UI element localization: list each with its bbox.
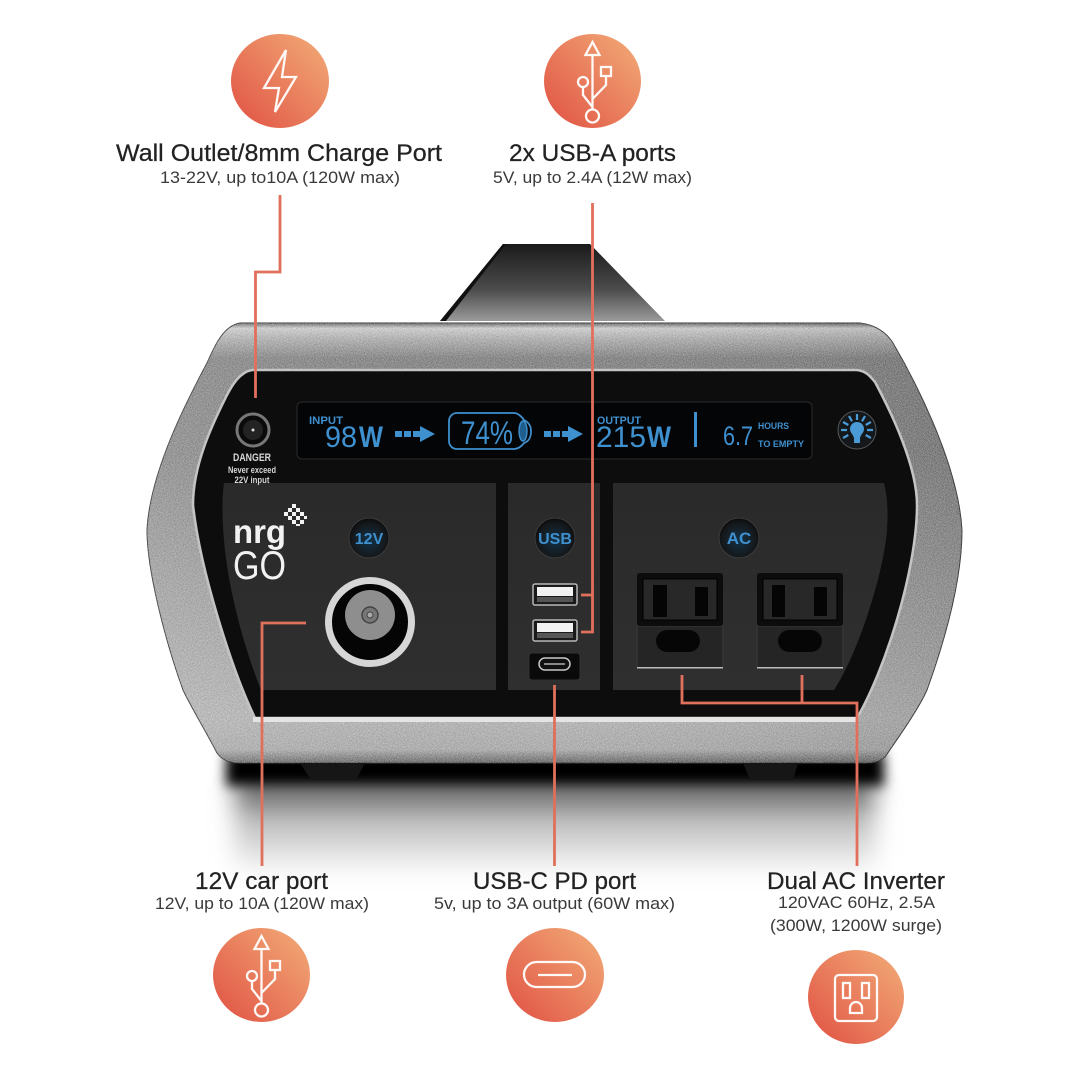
label: dual AC inverter: (300W, 1200W surge) (770, 916, 942, 935)
USB badge: USB (538, 531, 572, 548)
output reading: W (647, 421, 672, 454)
12V badge (349, 518, 389, 558)
icon: AC outlet (808, 950, 904, 1044)
label: dual AC inverter (767, 868, 945, 935)
icon: USB bottom (213, 928, 310, 1022)
label: dual AC inverter: 120VAC 60Hz, 2.5A (778, 893, 936, 912)
LCD display (297, 402, 812, 459)
arrow (544, 426, 583, 442)
icon: light button (838, 411, 876, 449)
icon: USB-C (506, 928, 604, 1022)
label: wall outlet charge port: Wall Outlet/8mm Charge Port (116, 140, 442, 167)
12V car socket (328, 580, 412, 664)
handle (440, 244, 665, 321)
lower highlight (253, 717, 858, 722)
label: 12V car port (155, 868, 369, 913)
input reading: W (359, 421, 384, 454)
label: USB-C PD port: USB-C PD port (473, 868, 636, 895)
label: 12V car port: 12V car port (195, 868, 328, 895)
time remaining: TO EMPTY (758, 439, 805, 450)
black front panel (193, 370, 917, 718)
label: USB-C PD port: 5v, up to 3A output (60W max) (434, 894, 675, 913)
USB-A port 1 (533, 584, 577, 605)
left grey panel (222, 483, 496, 690)
leader line: AC outlets (682, 675, 857, 866)
feet (300, 763, 798, 780)
right grey panel (613, 483, 888, 690)
danger warning (228, 452, 276, 486)
label: wall outlet charge port: 13-22V, up to10A (120W max) (160, 168, 400, 187)
bezel speckle texture (140, 320, 970, 766)
USB badge (535, 518, 575, 558)
infographic: power station port guide (116, 34, 962, 1044)
metal bezel (147, 323, 962, 763)
time remaining: 6.7 (723, 421, 753, 451)
USB-A port 2 (533, 620, 577, 641)
leader line: USB-A ports (581, 203, 592, 632)
input reading: INPUT (309, 415, 343, 427)
leader line: 12V car port (262, 623, 306, 866)
AC outlet 1 (637, 573, 723, 668)
label: USB-A ports (493, 140, 692, 187)
danger warning: Never exceed (228, 465, 276, 476)
12V badge: 12V (355, 531, 384, 548)
label: 12V car port: 12V, up to 10A (120W max) (155, 894, 369, 913)
AC badge: AC (727, 529, 751, 548)
output reading (596, 415, 672, 454)
centre grey panel (508, 483, 600, 690)
device body (140, 320, 970, 766)
USB-C port (529, 653, 580, 680)
arrow (395, 426, 435, 442)
output reading: OUTPUT (597, 415, 641, 427)
label: USB-C PD port (434, 868, 675, 913)
AC badge (719, 518, 759, 558)
danger warning: DANGER (233, 452, 271, 464)
time remaining (723, 421, 805, 451)
label: USB-A ports: 5V, up to 2.4A (12W max) (493, 168, 692, 187)
nrg Go logo: GO (233, 544, 286, 588)
output reading: 215 (596, 421, 646, 454)
input reading (309, 415, 384, 454)
leader line: USB-C port (553, 685, 556, 866)
battery: 74% (461, 415, 513, 451)
divider (694, 412, 697, 447)
input reading: 98 (325, 421, 357, 454)
charge port (237, 414, 269, 446)
ground shadow (226, 752, 884, 875)
danger warning: 22V input (234, 475, 270, 486)
nrg Go logo (233, 504, 307, 588)
AC outlet 2 (757, 573, 843, 668)
label: dual AC inverter: Dual AC Inverter (767, 868, 945, 895)
label: wall outlet charge port (116, 140, 442, 187)
icon: USB top (544, 34, 641, 128)
time remaining: HOURS (758, 421, 789, 432)
leader line: charge port (256, 195, 280, 398)
nrg Go logo: nrg (233, 513, 286, 550)
label: USB-A ports: 2x USB-A ports (509, 140, 676, 167)
icon: lightning bolt (231, 34, 329, 128)
